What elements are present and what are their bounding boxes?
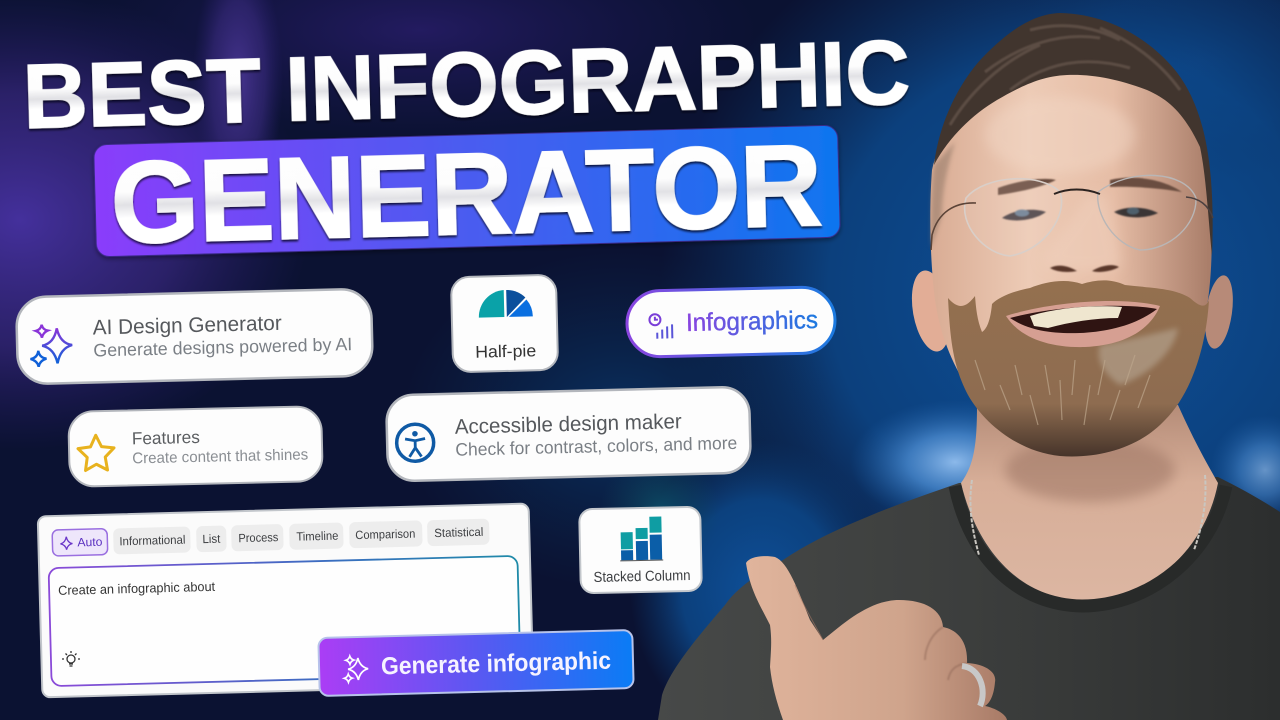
chip: Timeline: [289, 522, 344, 550]
card: Half-pie: Half-pie: [475, 341, 536, 362]
chip: Auto: Auto: [77, 535, 103, 549]
chip: Process: [231, 524, 284, 551]
head: [930, 64, 1212, 450]
chip: Informational: [113, 526, 191, 554]
beard: [948, 280, 1209, 456]
forehead highlight: [985, 97, 1135, 173]
chip: Statistical: Statistical: [434, 525, 483, 540]
icon: star: [78, 435, 115, 471]
card: Accessible design maker: [386, 387, 751, 481]
card: Accessible design maker: Accessible design maker: [455, 410, 682, 439]
pill: Infographics: Infographics: [686, 306, 818, 337]
necklace: [970, 475, 1206, 555]
title line: BEST INFOGRAPHIC: BEST INFOGRAPHIC: [22, 22, 911, 148]
presenter photo: [658, 13, 1280, 720]
icon: sparkles: [30, 324, 73, 367]
thumbs-up hand: [746, 556, 1007, 720]
icon: sparkles: [344, 656, 368, 682]
card: Stacked Column: [579, 507, 702, 593]
ring: [962, 666, 983, 706]
nose: [1042, 195, 1121, 272]
chip: List: [196, 526, 227, 552]
card: AI Design Generator: Generate designs powered by AI: [93, 334, 352, 360]
mouth: [1006, 301, 1160, 347]
chip: List: List: [202, 532, 221, 546]
prompt text area: Create an infographic about: [58, 579, 216, 598]
prompt text area: [49, 556, 520, 686]
chip: Comparison: [349, 520, 423, 548]
glasses: [931, 175, 1213, 256]
card: AI Design Generator: AI Design Generator: [92, 312, 282, 339]
chip: Auto: [52, 529, 108, 556]
eyes: [1002, 208, 1158, 220]
neck shadow: [1005, 438, 1175, 502]
ear right: [1201, 274, 1237, 350]
card: Half-pie: [451, 275, 558, 372]
icon: half-pie chart: [478, 289, 533, 318]
button: Generate infographic: Generate infographic: [381, 648, 611, 680]
card: Features: Features: [132, 427, 200, 448]
chips row: [52, 519, 490, 556]
card: AI Design Generator: [16, 289, 373, 384]
card: Features: Create content that shines: [132, 446, 309, 467]
chart: stacked columns: [619, 517, 663, 561]
pill: Infographics: [626, 287, 836, 357]
collar: [955, 486, 1226, 606]
card: Accessible design maker: Check for contrast, colors, and more: [455, 433, 738, 460]
chip: Comparison: Comparison: [355, 527, 415, 542]
chip: Statistical: [427, 519, 490, 546]
chip: Process: Process: [238, 530, 279, 545]
card: Features: [68, 406, 323, 487]
eyebrows: [998, 178, 1182, 195]
chip: Timeline: Timeline: [296, 529, 339, 544]
neck: [961, 405, 1218, 600]
card: Stacked Column: Stacked Column: [593, 568, 691, 586]
hair: [931, 13, 1213, 256]
ear left: [906, 267, 956, 355]
icon: accessibility: [396, 424, 434, 462]
panel: prompt generator: [38, 504, 533, 697]
chip: Informational: Informational: [119, 533, 186, 548]
title banner: GENERATOR: GENERATOR: [109, 120, 823, 268]
icon: chart and clock: [649, 314, 672, 339]
shirt: [658, 477, 1280, 720]
button: Generate infographic: [318, 630, 634, 696]
icon: light bulb: [62, 651, 80, 666]
